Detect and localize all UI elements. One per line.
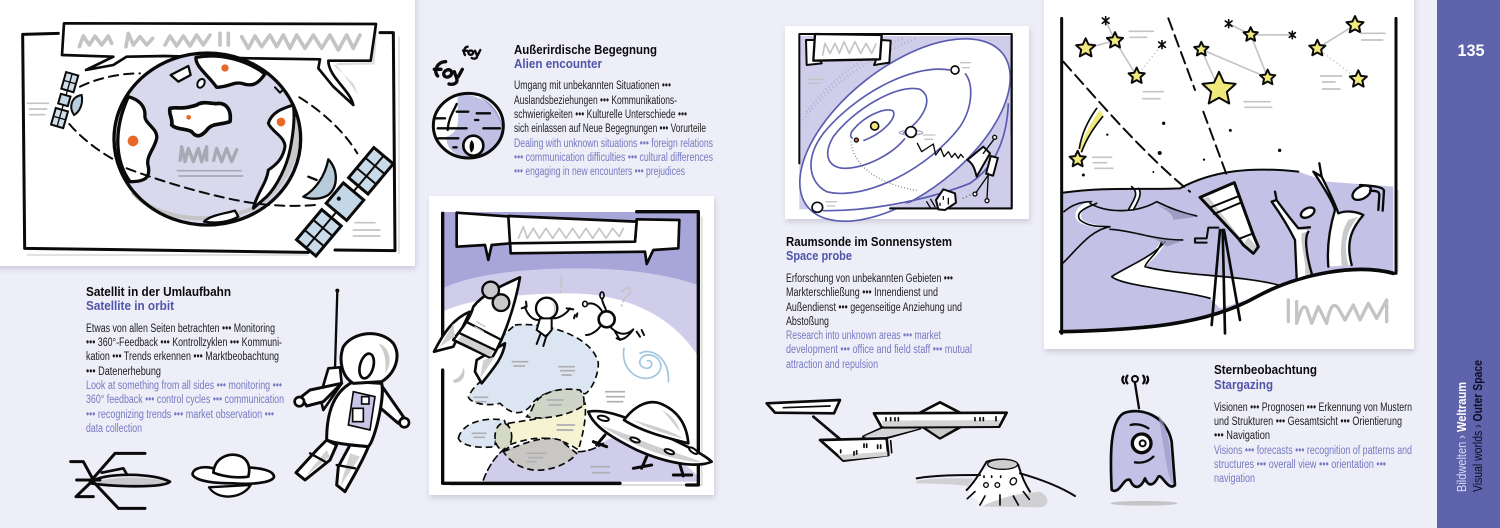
orbit rings [811, 69, 971, 193]
astronaut figure [522, 298, 577, 346]
exclamation and question marks [561, 276, 630, 306]
space probe [963, 135, 998, 203]
panel: solar system illustration [768, 4, 1042, 256]
text block: Sternbeobachtung: und Strukturen ••• Gesamtsicht ••• Orientierung [1214, 416, 1402, 428]
text block: Raumsonde im Sonnensystem: Research into unknown areas ••• market [786, 330, 942, 342]
section label German: Bildwelten › Weltraum [1455, 382, 1469, 492]
text block: Satellit in der Umlaufbahn: Look at something from all sides ••• monitoring ••• [86, 380, 282, 392]
text block: Raumsonde im Sonnensystem: Außendienst ••• gegenseitige Anziehung und [786, 302, 962, 314]
icon: crater [917, 459, 1075, 507]
text block: Außerirdische Begegnung: schwierigkeiten ••• Kulturelle Unterschiede ••• [514, 109, 687, 121]
illustration: rocket, astronaut, alien and UFO [434, 212, 712, 485]
illustration: telescope, hills and stars [1061, 16, 1397, 333]
asteroid [927, 189, 956, 210]
icon: alien glyphs [434, 47, 480, 84]
small satellite [51, 72, 78, 128]
illustration: globe and satellites [23, 23, 399, 256]
text block: Sternbeobachtung: Sternbeobachtung [1214, 363, 1317, 377]
shooting star [1070, 108, 1103, 166]
panel: satellite orbit illustration [0, 0, 415, 266]
UFO [588, 402, 712, 476]
text block: Satellit in der Umlaufbahn: Satellite in orbit [86, 299, 175, 313]
text block: Satellit in der Umlaufbahn: data collection [86, 423, 142, 435]
panel: alien encounter illustration [429, 196, 714, 495]
person left [1272, 192, 1316, 278]
large satellite [296, 147, 394, 256]
icon: one-eyed ghost alien [1111, 376, 1177, 506]
text block: Satellit in der Umlaufbahn: 360° feedback ••• control cycles ••• communication [86, 394, 284, 406]
text block: Außerirdische Begegnung: Außerirdische Begegnung [514, 43, 657, 57]
text block: Raumsonde im Sonnensystem: development ••• office and field staff ••• mutual [786, 344, 972, 356]
text block: Satellit in der Umlaufbahn: ••• recognizing trends ••• market observation ••• [86, 409, 274, 421]
text block: Außerirdische Begegnung: ••• communication difficulties ••• cultural differences [514, 152, 713, 164]
text block: Sternbeobachtung: ••• Navigation [1214, 430, 1270, 442]
icon: death-star planet [433, 93, 503, 158]
section label English: Visual worlds › Outer Space [1471, 360, 1485, 492]
text block: Raumsonde im Sonnensystem: Abstoßung [786, 316, 829, 328]
text block: Außerirdische Begegnung: ••• engaging in new encounters ••• prejudices [514, 166, 685, 178]
text block: Satellit in der Umlaufbahn [86, 285, 284, 435]
text block: Sternbeobachtung: Stargazing [1214, 378, 1273, 392]
text block: Sternbeobachtung: Visionen ••• Prognosen ••• Erkennung von Mustern [1214, 402, 1412, 414]
planets [812, 66, 959, 212]
text block: Satellit in der Umlaufbahn: ••• Datenerhebung [86, 366, 161, 378]
landscape [1061, 170, 1397, 332]
galaxy [623, 348, 668, 382]
text block: Sternbeobachtung: navigation [1214, 473, 1255, 485]
banner [806, 34, 891, 65]
telescope [1195, 183, 1258, 333]
text block: Außerirdische Begegnung: Dealing with unknown situations ••• foreign relations [514, 138, 713, 150]
asterisks [1102, 17, 1295, 49]
person right [1313, 163, 1384, 267]
probe signal zigzag [917, 143, 963, 158]
icon: rocket ship [71, 453, 170, 508]
text block: Sternbeobachtung [1214, 363, 1412, 485]
text block: Satellit in der Umlaufbahn: ••• 360°-Feedback ••• Kontrollzyklen ••• Kommuni- [86, 337, 282, 349]
text block: Raumsonde im Sonnensystem: Markterschließung ••• Innendienst und [786, 287, 938, 299]
text block: Raumsonde im Sonnensystem: Raumsonde im Sonnensystem [786, 235, 952, 249]
icon: ringed planet [193, 455, 274, 497]
stars [1076, 16, 1367, 104]
text block: Satellit in der Umlaufbahn: Satellit in der Umlaufbahn [86, 285, 231, 299]
text block: Raumsonde im Sonnensystem: Space probe [786, 249, 852, 263]
map blobs [458, 325, 625, 480]
sidebar: page number and section path [1437, 0, 1500, 528]
dashed orbit [69, 73, 357, 206]
scribble [1288, 300, 1387, 323]
rocket [434, 277, 520, 383]
text block: Außerirdische Begegnung: Umgang mit unbekannten Situationen ••• [514, 80, 671, 92]
speech banner [62, 23, 376, 105]
speech bubbles [457, 213, 679, 264]
sight lines [1063, 18, 1227, 192]
illustration: orbits and space probe [768, 4, 1042, 256]
text block: Raumsonde im Sonnensystem: Erforschung von unbekannten Gebieten ••• [786, 273, 953, 285]
constellation lines [1086, 21, 1358, 89]
page number: 135 [1458, 41, 1484, 60]
text block: Außerirdische Begegnung: Alien encounter [514, 57, 602, 71]
alien figure [583, 292, 644, 340]
icon: astronaut [295, 289, 409, 492]
text block: Satellit in der Umlaufbahn: Etwas von allen Seiten betrachten ••• Monitoring [86, 323, 275, 335]
text block: Raumsonde im Sonnensystem: attraction and repulsion [786, 359, 878, 371]
text block: Sternbeobachtung: structures ••• overall view ••• orientation ••• [1214, 459, 1386, 471]
icon: starship [767, 400, 1007, 461]
text block: Raumsonde im Sonnensystem [786, 235, 972, 371]
text block: Außerirdische Begegnung: Auslandsbeziehungen ••• Kommunikations- [514, 95, 677, 107]
dotted band [803, 38, 917, 120]
panel: stargazing illustration [1044, 0, 1414, 349]
globe [114, 53, 301, 225]
sky dots [1082, 122, 1281, 176]
text block: Sternbeobachtung: Visions ••• forecasts ••• recognition of patterns and [1214, 445, 1412, 457]
text block: Außerirdische Begegnung: sich einlassen auf Neue Begegnungen ••• Vorurteile [514, 123, 706, 135]
text block: Außerirdische Begegnung [514, 43, 713, 178]
text block: Satellit in der Umlaufbahn: kation ••• Trends erkennen ••• Marktbeobachtung [86, 351, 279, 363]
